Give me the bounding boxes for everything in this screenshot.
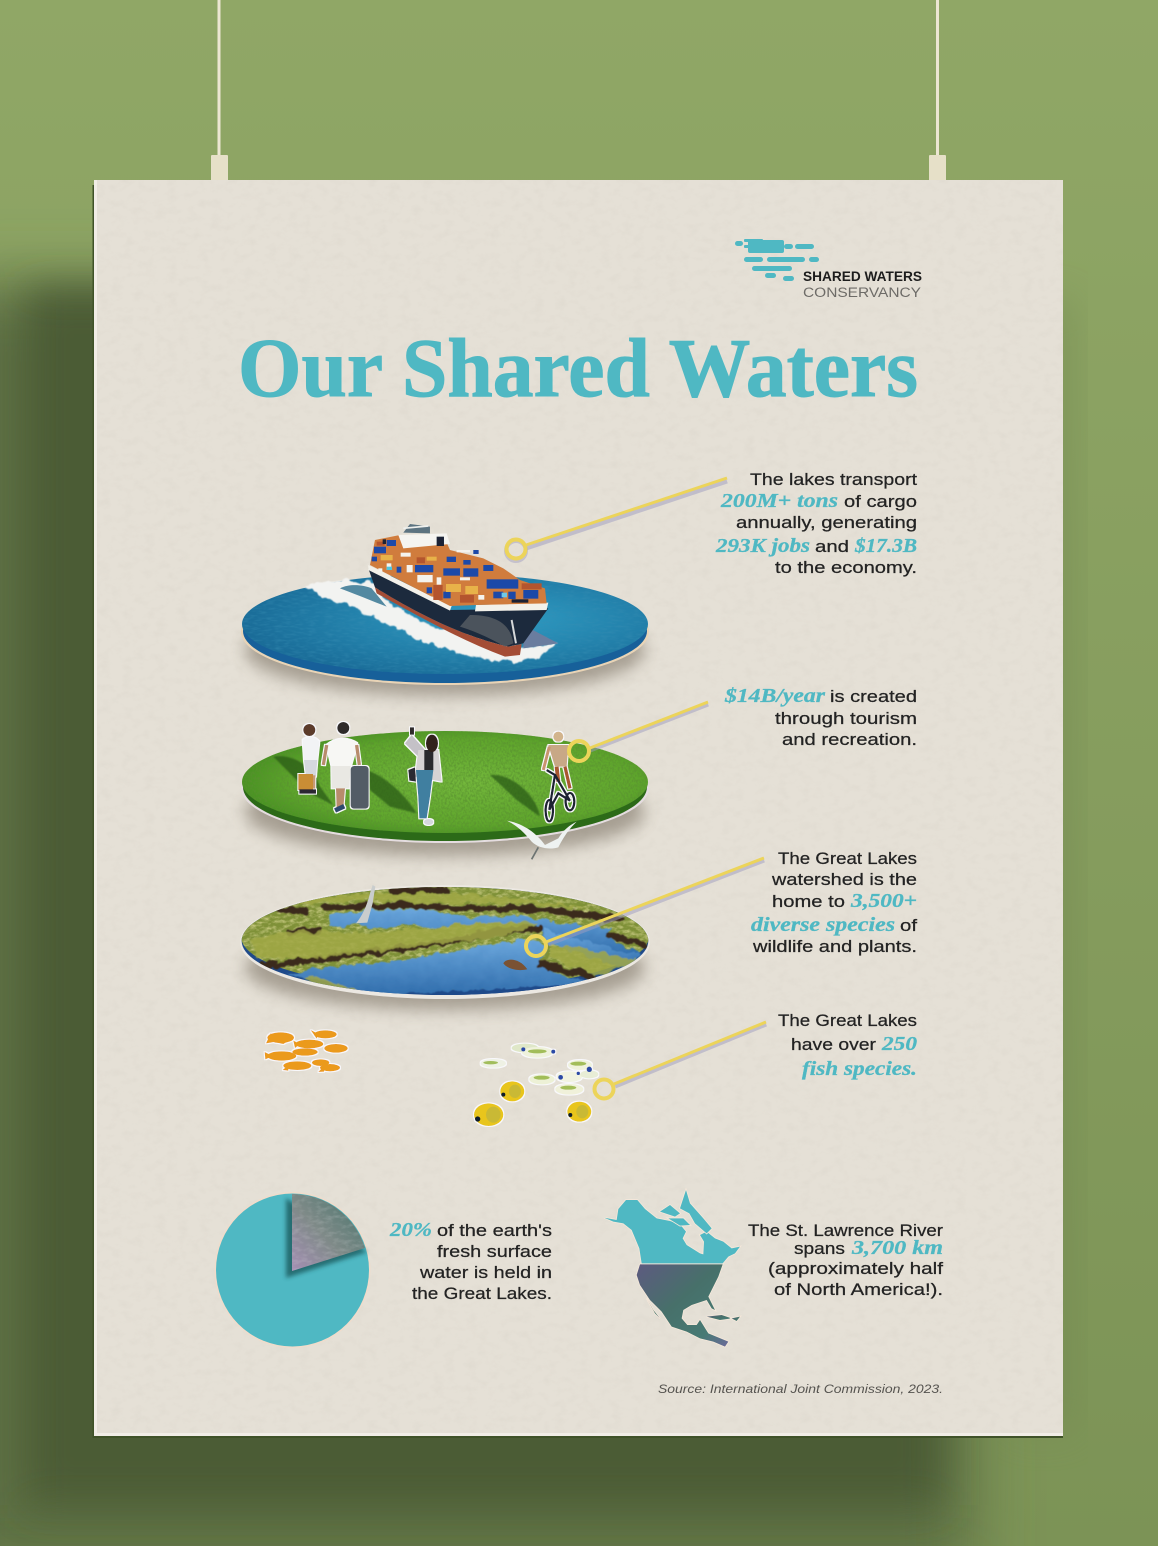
callout: fish pointer [594,1022,766,1098]
disc side [241,733,649,843]
woman with phone [405,727,442,825]
text block: species: The Great Lakes [778,849,917,868]
disc top water [242,574,648,674]
pie chart: 20 percent [214,1192,370,1348]
text block: cargo: 200M+ tons [720,490,838,512]
text block: fish: 250 [881,1033,917,1055]
text block: cargo: $17.3B [854,535,917,557]
text block: cargo: of cargo [844,492,917,511]
source note: Source: International Joint Commission, 2023. [658,1382,943,1396]
text block: St. Lawrence River: spans [794,1239,845,1258]
icon: swimming bird [503,960,527,970]
text block: fresh water share: of the earth's [437,1221,552,1240]
text block: St. Lawrence River: (approximately half [768,1259,943,1278]
hanging string right [929,0,946,188]
icon: orange fish school [265,1030,348,1072]
map: North America [604,1190,740,1347]
marsh surface [240,883,650,1000]
text block: cargo: 293K jobs [715,535,810,557]
text block: tourism: $14B/year [724,685,825,707]
pie wedge [292,1194,365,1271]
text block: species: home to [772,892,845,911]
text block: St. Lawrence River: of North America!). [774,1280,943,1299]
disc top grass [242,731,648,833]
text block: tourism: through tourism [775,709,917,728]
text block: St. Lawrence River: 3,700 km [851,1237,943,1259]
text block: fresh water share: 20% [389,1219,432,1241]
text block: fresh water share: the Great Lakes. [412,1284,552,1303]
text block: tourism [724,685,917,749]
icon: flying egret [507,821,577,859]
text block: fish: have over [791,1035,876,1054]
text block: fish: The Great Lakes [778,1011,917,1030]
text block: tourism: and recreation. [782,730,917,749]
text block: species: diverse species [751,914,895,936]
panel: shipping water disc [241,524,649,696]
text block: St. Lawrence River: The St. Lawrence River [748,1221,943,1240]
map: northern half [604,1190,740,1263]
disc rim [240,885,650,999]
text block: species: 3,500+ [850,890,917,912]
text block: cargo [715,470,917,577]
text block: St. Lawrence River [748,1221,943,1299]
icon: water stripes [735,239,819,281]
callout: biodiversity pointer [526,858,764,956]
callout: cargo pointer [506,478,727,561]
lower pool [287,940,587,997]
logo: Shared Waters Conservancy [735,239,922,300]
ship hull [368,568,548,647]
text block: fresh water share: fresh surface [437,1242,552,1261]
icon: heron [356,885,375,923]
logo name: SHARED WATERS [803,269,922,284]
text block: species: wildlife and plants. [752,937,917,956]
hanging string left [211,0,228,188]
text block: cargo: to the economy. [775,558,917,577]
text block: species [751,849,917,956]
ship containers [370,535,547,606]
title: Our Shared Waters [238,322,918,415]
child with suitcase [298,724,319,794]
yellow fish [474,1081,591,1126]
icon: reef fish school [474,1044,598,1126]
panel: wetland disc [240,883,650,1010]
ship wake [305,580,558,662]
text block: cargo: and [815,537,849,556]
people and cyclist [273,722,574,825]
text block: cargo: annually, generating [736,513,917,532]
text block: species: of [900,916,917,935]
text block: fresh water share [389,1219,552,1303]
moss highlights [250,893,637,994]
panel: tourism grass disc [241,722,649,859]
disc side [241,579,649,685]
panel: poster sheet [92,180,1063,1438]
right pool edge [543,930,642,970]
text block: fish: fish species. [802,1058,917,1080]
callout: tourism pointer [569,702,708,761]
logo subtitle: CONSERVANCY [803,285,921,300]
map: southern half [637,1264,740,1347]
text block: fish [778,1011,917,1080]
icon: cargo ship [305,524,558,662]
text block: fresh water share: water is held in [419,1263,552,1282]
striped fish [481,1044,598,1095]
pie wedge shadow [286,1198,367,1278]
poster drop shadow [0,285,1075,1546]
text block: cargo: The lakes transport [750,470,917,489]
text block: tourism: is created [830,687,917,706]
upper pool [328,909,642,956]
grass shadows [273,756,540,817]
adult with luggage [323,722,369,813]
muddy banks [263,890,645,978]
text block: species: watershed is the [771,870,917,889]
cyclist [543,732,574,821]
